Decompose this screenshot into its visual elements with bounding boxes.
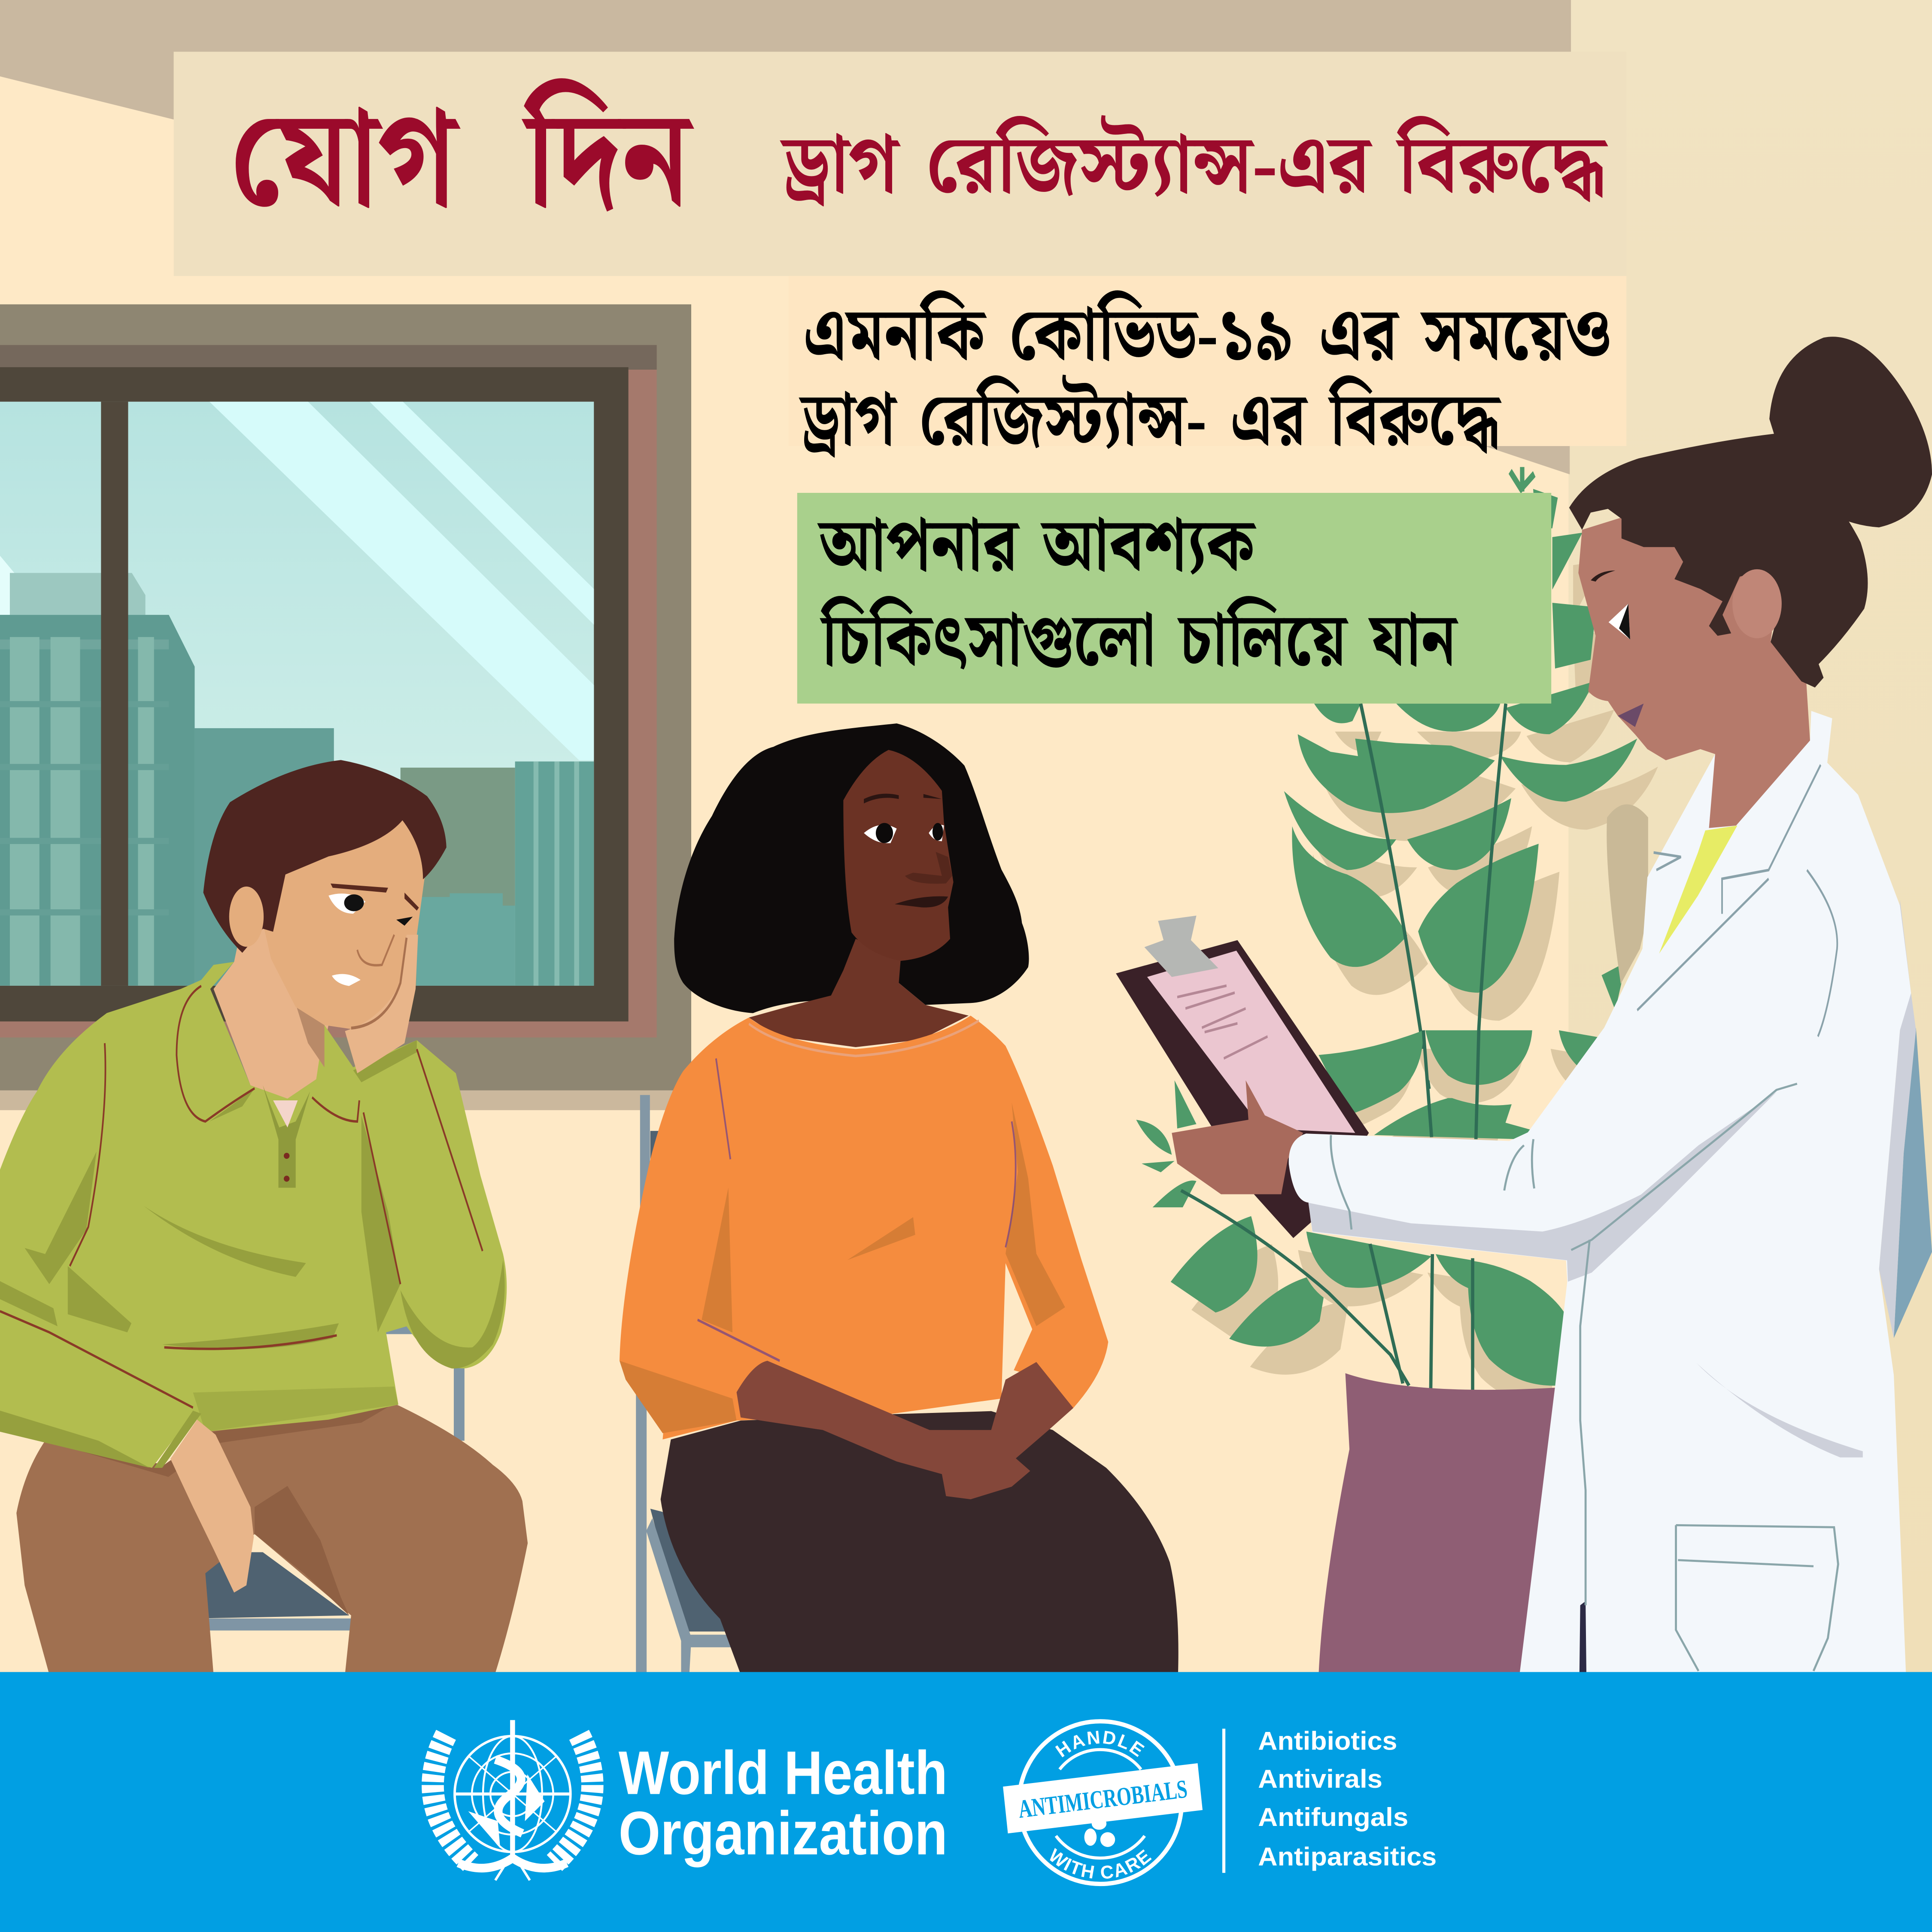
collar lines bbox=[1637, 765, 1837, 1036]
call to action line one: আপনার আবশ্যক bbox=[817, 504, 1257, 586]
green message panel bbox=[797, 493, 1551, 704]
call to action line two: চিকিৎসাগুলো চালিয়ে যান bbox=[819, 595, 1459, 680]
doctor's eye and brow bbox=[1591, 571, 1630, 639]
man's ear bbox=[229, 887, 264, 947]
shirt seam lines bbox=[0, 986, 483, 1408]
doctor's wall shadow bbox=[1607, 804, 1648, 984]
antimicrobial list: Antibiotics bbox=[1258, 1726, 1397, 1755]
man's trousers bbox=[16, 1403, 528, 1674]
undershirt bbox=[273, 1100, 298, 1127]
window bbox=[0, 304, 691, 1110]
man's hair bbox=[203, 760, 447, 953]
clipboard clip bbox=[1144, 916, 1218, 977]
coat details bbox=[1308, 1084, 1863, 1674]
title: যোগ দিন bbox=[231, 76, 695, 233]
clipboard and hand bbox=[1116, 916, 1369, 1238]
lower leaf shadows bbox=[1298, 1049, 1598, 1404]
message line one: এমনকি কোভিড-১৯ এর সময়েও bbox=[803, 290, 1612, 375]
woman's eyes and lips bbox=[864, 794, 952, 908]
doctor's ear bbox=[1732, 569, 1782, 638]
plant, upper section bbox=[1136, 467, 1658, 1375]
doctor's hand bbox=[1172, 1080, 1303, 1194]
World Health Organization wordmark: Organization bbox=[619, 1799, 948, 1868]
man sitting bbox=[0, 760, 528, 1674]
subtitle: ড্রাগ রেজিস্ট্যান্স-এর বিরুদ্ধে bbox=[780, 115, 1608, 209]
sweater neckline trim bbox=[749, 1021, 979, 1056]
doctor's coat bbox=[1289, 711, 1911, 1672]
antimicrobial list: Antiparasitics bbox=[1258, 1842, 1437, 1871]
text panel bbox=[789, 276, 1626, 446]
woman's chair bbox=[636, 1095, 738, 1674]
woman's crossed arms bbox=[737, 1361, 1073, 1499]
woman's face bbox=[843, 750, 954, 961]
WHO emblem bbox=[433, 1720, 592, 1880]
neck shadow bbox=[296, 1004, 325, 1067]
man's chair bbox=[193, 1287, 465, 1631]
plant shadows bbox=[1191, 561, 1658, 1375]
coat back lining bbox=[1894, 1027, 1932, 1338]
jaw line bbox=[351, 938, 407, 1028]
woman's sweater bbox=[620, 1016, 1108, 1440]
ceiling shadow bbox=[0, 0, 1571, 119]
plant leaves bbox=[1171, 533, 1637, 1347]
headline panel bbox=[174, 52, 1626, 276]
woman sitting bbox=[620, 723, 1179, 1674]
lower leaves bbox=[1306, 1030, 1606, 1386]
woman's neck bbox=[749, 939, 969, 1047]
World Health Organization wordmark: World Health bbox=[619, 1739, 948, 1807]
trouser creases bbox=[45, 1403, 394, 1616]
man's shirt bbox=[0, 962, 507, 1468]
antimicrobial list bbox=[1258, 1726, 1437, 1871]
small leaves on the branch bbox=[1136, 489, 1558, 1207]
clipboard bbox=[1116, 940, 1369, 1238]
doctor's bun bbox=[1769, 337, 1932, 527]
clipboard paper bbox=[1147, 951, 1355, 1133]
footer band bbox=[0, 1672, 1932, 1932]
antimicrobial list: Antivirals bbox=[1258, 1764, 1382, 1793]
sweater shadows bbox=[620, 1103, 1065, 1433]
man's neck bbox=[213, 923, 328, 1099]
doctor's mouth bbox=[1618, 704, 1643, 727]
antimicrobial list: Antifungals bbox=[1258, 1802, 1408, 1832]
man's face bbox=[263, 802, 425, 1029]
shirt buttons bbox=[284, 1153, 289, 1182]
Handle Antimicrobials with Care badge: ANTIMICROBIALS bbox=[1017, 1774, 1189, 1824]
man's eyes and mouth bbox=[328, 884, 419, 986]
doctor's hair bbox=[1569, 434, 1868, 687]
World Health Organization wordmark bbox=[619, 1739, 948, 1868]
ceiling corner bbox=[1485, 446, 1570, 474]
plant, lower section and pot bbox=[1181, 1030, 1606, 1674]
woman's skirt bbox=[661, 1411, 1179, 1674]
plant stems bbox=[1361, 704, 1506, 1089]
Handle Antimicrobials with Care badge: HANDLE bbox=[1052, 1727, 1148, 1762]
woman's hair bbox=[674, 723, 1029, 1013]
man's hand on cheek bbox=[345, 935, 418, 1073]
shirt placket bbox=[263, 1085, 310, 1188]
plant top sprig bbox=[1510, 467, 1534, 492]
lower stems bbox=[1181, 1030, 1479, 1394]
message line two: ড্রাগ রেজিস্ট্যান্স- এর বিরুদ্ধে bbox=[799, 375, 1502, 460]
doctor's face and neck bbox=[1578, 517, 1810, 828]
doctor's yellow top bbox=[1659, 826, 1738, 954]
doctor bbox=[1289, 337, 1932, 1674]
Handle Antimicrobials with Care badge bbox=[1003, 1721, 1203, 1884]
coat side shade bbox=[1879, 899, 1916, 1338]
flower pot bbox=[1318, 1373, 1557, 1674]
paper lines bbox=[1177, 986, 1267, 1058]
sweater seam lines bbox=[698, 1058, 1016, 1361]
right wall bbox=[1568, 0, 1932, 1673]
Handle Antimicrobials with Care badge: WITH CARE bbox=[1045, 1845, 1156, 1883]
divider bbox=[1222, 1728, 1225, 1873]
man's lower hand bbox=[170, 1420, 254, 1592]
shirt shadows and folds bbox=[0, 1040, 505, 1468]
